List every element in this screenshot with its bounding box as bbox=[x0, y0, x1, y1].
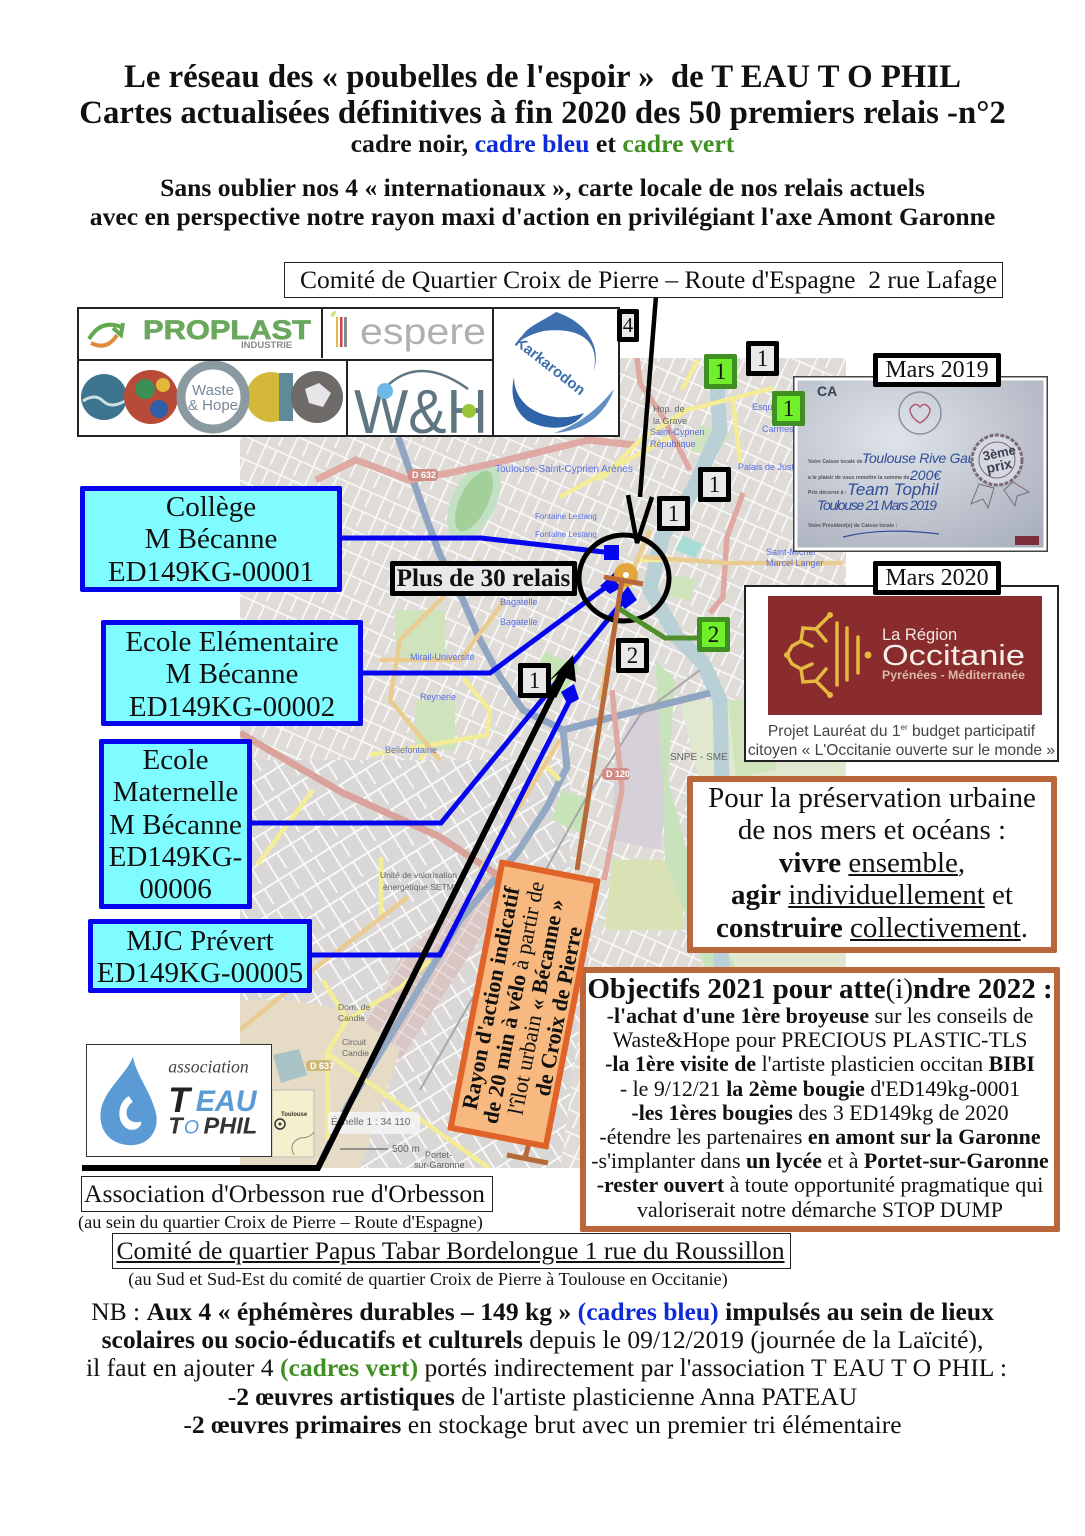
map of Toulouse: Esquirol bbox=[752, 402, 785, 412]
number box: green 1 bbox=[704, 354, 737, 389]
subtitle: frame colours: cadre noir, cadre bleu et cadre vert bbox=[351, 129, 734, 158]
blue box: MJC Prévert: MJC Prévert bbox=[126, 925, 274, 957]
logo: association T EAU T O PHIL: T bbox=[168, 1081, 193, 1120]
panel: Mars 2019 diploma: 3ème bbox=[981, 442, 1017, 464]
logo: espere: espere bbox=[360, 311, 486, 352]
map of Toulouse: Mirail-Université bbox=[410, 652, 475, 662]
callout: action radius: de 20 min à vélo à partir de bbox=[477, 879, 549, 1126]
blue box: Ecole Elémentaire: ED149KG-00002 bbox=[129, 691, 335, 723]
list of objectives: -les 1ères bougies des 3 ED149kg de 2020 bbox=[631, 1100, 1009, 1125]
title: Le réseau des « poubelles de l'espoir » de T EAU T O PHIL bbox=[124, 59, 961, 95]
panel: Mars 2019 diploma: Votre Président(e) de Caisse locale : bbox=[808, 523, 898, 529]
map of Toulouse: Fontaine Lestang bbox=[535, 512, 597, 521]
tag: Mars 2019: Mars 2019 bbox=[885, 357, 989, 383]
number box: green 1: 1 bbox=[715, 359, 726, 384]
partner logos panel bbox=[77, 307, 620, 437]
relay circle bbox=[579, 535, 669, 621]
number box: 4 partners bbox=[617, 309, 639, 342]
map of Toulouse: la Grave bbox=[653, 416, 687, 426]
arrow: black arrow from Association d'Orbesson bbox=[82, 655, 576, 1168]
map of Toulouse bbox=[240, 358, 846, 1168]
map of Toulouse: SNPE - SME bbox=[670, 752, 728, 763]
map of Toulouse: Carmes bbox=[762, 424, 794, 434]
panel: objectifs 2021 bbox=[580, 967, 1060, 1232]
list of objectives: -la 1ère visite de l'artiste plasticien occitan BIBI bbox=[605, 1051, 1035, 1076]
number box: black 1: 1 bbox=[709, 472, 720, 497]
panel: slogan: agir individuellement et bbox=[731, 879, 1013, 911]
tag: Mars 2020: Mars 2020 bbox=[885, 565, 989, 591]
map of Toulouse: Dom. de bbox=[338, 1002, 370, 1012]
caption: Occitanie project bbox=[748, 723, 1055, 759]
intro text: Sans oublier nos 4 « internationaux », carte locale de nos relais actuels bbox=[160, 173, 925, 202]
map of Toulouse: Candie bbox=[342, 1048, 369, 1058]
map of Toulouse: Circuit bbox=[342, 1037, 367, 1047]
number box: green 1: 1 bbox=[783, 396, 794, 421]
panel: Mars 2019 diploma: Toulouse Rive Gauche bbox=[862, 450, 997, 466]
callout: action radius: de Croix de Pierre bbox=[530, 924, 587, 1098]
map of Toulouse: Toulouse-Saint-Cyprien Arènes bbox=[495, 464, 633, 475]
label: Comité de quartier Papus: Comité de quartier Papus Tabar Bordelongue 1 rue du Roussillon bbox=[116, 1236, 785, 1265]
panel: Mars 2019 diploma: Team Tophil bbox=[847, 480, 940, 499]
list of objectives: valoriserait notre démarche STOP DUMP bbox=[637, 1197, 1003, 1222]
map of Toulouse: Candie bbox=[338, 1013, 365, 1023]
blue box: Collège bbox=[80, 486, 342, 592]
caption: Occitanie project: citoyen « L'Occitanie ouverte sur le monde » bbox=[748, 742, 1055, 759]
map of Toulouse: Saint-Cyprien bbox=[650, 427, 705, 437]
caption: quartier Croix de Pierre: (au sein du quartier Croix de Pierre – Route d'Espagne) bbox=[78, 1212, 483, 1232]
blue box: Collège: Collège bbox=[166, 491, 256, 523]
intro text bbox=[90, 173, 995, 231]
blue box: Ecole Maternelle: Maternelle bbox=[113, 776, 238, 808]
logo: Proplast: PROPLAST bbox=[143, 315, 311, 345]
note: NB bottom text: il faut en ajouter 4 (cadres vert) portés indirectement par l'association T EAU T O PHIL : bbox=[86, 1353, 1007, 1382]
number box: black 2 bbox=[616, 638, 649, 673]
map of Toulouse: Fontaine Lestang bbox=[535, 530, 597, 539]
panel: Occitanie award bbox=[744, 585, 1059, 762]
blue box: Ecole Maternelle: M Bécanne bbox=[109, 809, 242, 841]
panel: Mars 2019 diploma: prix bbox=[985, 455, 1013, 476]
logo: Karkarodon bbox=[492, 309, 621, 435]
blue box: Ecole Maternelle: Ecole bbox=[142, 744, 208, 776]
logo: Waste and Hope bbox=[79, 359, 346, 437]
list of objectives: Waste&Hope pour PRECIOUS PLASTIC-TLS bbox=[613, 1027, 1027, 1052]
arrow: Collège bbox=[341, 538, 619, 560]
locator mini map: Toulouse bbox=[281, 1112, 308, 1118]
logo: Région Occitanie: La Région bbox=[882, 626, 957, 644]
logo: espere bbox=[321, 309, 494, 358]
logo: Waste and Hope: Waste bbox=[192, 382, 234, 399]
list of objectives: -étendre les partenaires en amont sur la Garonne bbox=[599, 1124, 1041, 1149]
number box: black 1 bbox=[698, 467, 731, 502]
number box: black 1 bbox=[746, 341, 779, 376]
arrow: Ecole Elémentaire bbox=[362, 570, 625, 673]
title bbox=[79, 59, 1006, 131]
blue box: Ecole Maternelle bbox=[99, 739, 252, 909]
panel: Mars 2019 diploma: Prix décerné à : bbox=[808, 490, 847, 496]
note: NB bottom text: -2 œuvres primaires en stockage brut avec un premier tri élémentaire bbox=[183, 1410, 902, 1439]
panel: slogan: de nos mers et océans : bbox=[738, 814, 1006, 846]
blue box: Ecole Elémentaire: Ecole Elémentaire bbox=[125, 626, 339, 658]
map of Toulouse: Portet- bbox=[425, 1150, 452, 1160]
note: NB bottom text: -2 œuvres artistiques de l'artiste plasticienne Anna PATEAU bbox=[228, 1382, 857, 1411]
map of Toulouse: Échelle 1 : 34 110 bbox=[331, 1115, 411, 1128]
map of Toulouse: Unité de valorisation bbox=[380, 870, 457, 880]
logo: Waste and Hope: & Hope bbox=[188, 397, 238, 414]
logo: Région Occitanie: Occitanie bbox=[882, 640, 1025, 672]
list of objectives: -rester ouvert à toute opportunité pragmatique qui bbox=[597, 1172, 1043, 1197]
blue box: Ecole Elémentaire: M Bécanne bbox=[166, 658, 298, 690]
map of Toulouse: République bbox=[650, 439, 696, 449]
logo: Région Occitanie bbox=[768, 596, 1042, 715]
map of Toulouse: Bellefontaine bbox=[385, 745, 437, 755]
blue box: MJC Prévert bbox=[88, 919, 312, 993]
logo: association T EAU T O PHIL: association bbox=[168, 1057, 249, 1077]
logo: Proplast bbox=[87, 315, 312, 351]
arrow: Ecole Maternelle bbox=[251, 586, 637, 823]
panel: Mars 2019 diploma: Votre Caisse locale de : bbox=[808, 459, 866, 465]
logo: Proplast: INDUSTRIE bbox=[241, 340, 292, 351]
number box: black 1: 1 bbox=[668, 501, 679, 526]
callout: action radius: l'îlot urbain « Bécanne » bbox=[503, 897, 569, 1117]
list of objectives bbox=[591, 1003, 1049, 1222]
number box: black 1: 1 bbox=[757, 346, 768, 371]
panel: Mars 2019 diploma: a le plaisir de vous remettre la somme de : bbox=[808, 475, 913, 481]
map of Toulouse: Hop. de bbox=[653, 404, 685, 414]
panel: Mars 2019 diploma bbox=[793, 376, 1048, 552]
number box: green 1 bbox=[772, 391, 805, 426]
logo: association T EAU T O PHIL: EAU bbox=[196, 1085, 257, 1118]
blue box: Collège: ED149KG-00001 bbox=[108, 556, 314, 588]
logo: association T EAU T O PHIL: O bbox=[184, 1116, 199, 1138]
map of Toulouse: D 632 bbox=[412, 470, 436, 480]
list of objectives: - le 9/12/21 la 2ème bougie d'ED149kg-0001 bbox=[620, 1076, 1020, 1101]
callout: action radius bbox=[447, 859, 601, 1150]
map of Toulouse: 500 m bbox=[392, 1144, 420, 1155]
logo: association T EAU T O PHIL bbox=[86, 1044, 272, 1157]
blue box: Ecole Elémentaire bbox=[101, 620, 363, 726]
intro text: avec en perspective notre rayon maxi d'action en privilégiant l'axe Amont Garonne bbox=[90, 202, 995, 231]
logo: Région Occitanie: Pyrénées - Méditerranée bbox=[882, 668, 1025, 682]
blue box: Collège: M Bécanne bbox=[145, 523, 277, 555]
arrow: MJC Prévert bbox=[311, 684, 579, 955]
caption: Sud et Sud-Est: (au Sud et Sud-Est du comité de quartier Croix de Pierre à Toulouse en Occitanie) bbox=[128, 1269, 728, 1289]
map of Toulouse: Palais de Justice bbox=[738, 462, 806, 472]
label: Comité de Quartier Croix de Pierre: Comité de Quartier Croix de Pierre – Route d'Espagne 2 rue Lafage bbox=[300, 265, 997, 294]
number box: green 2 bbox=[697, 617, 730, 652]
label: Association d'Orbesson: Association d'Orbesson rue d'Orbesson bbox=[84, 1179, 485, 1208]
label: Plus de 30 relais: Plus de 30 relais bbox=[397, 565, 570, 592]
map of Toulouse: Bagatelle bbox=[500, 597, 538, 607]
panel: Mars 2019 diploma: CA bbox=[817, 383, 837, 399]
logo: Karkarodon: Karkarodon bbox=[512, 334, 588, 399]
number box: black 1: 1 bbox=[529, 668, 540, 693]
map of Toulouse: Bagatelle bbox=[500, 617, 538, 627]
blue box: Ecole Maternelle: 00006 bbox=[139, 873, 212, 905]
panel: slogan: construire collectivement. bbox=[716, 912, 1028, 944]
number box: black 2: 2 bbox=[627, 643, 638, 668]
map of Toulouse: Reynerie bbox=[420, 692, 456, 702]
map of Toulouse: énergétique SETMI bbox=[383, 882, 456, 892]
panel: Mars 2019 diploma: 200€ bbox=[909, 467, 942, 483]
list of objectives: -l'achat d'une 1ère broyeuse sur les conseils de bbox=[607, 1003, 1033, 1028]
note: NB bottom text: NB : Aux 4 « éphémères durables – 149 kg » (cadres bleu) impulsés au sein de lieux bbox=[91, 1297, 994, 1326]
panel: slogan bbox=[687, 776, 1057, 953]
heading: objectifs: Objectifs 2021 pour atte(i)ndre 2022 : bbox=[587, 973, 1053, 1005]
logo: association T EAU T O PHIL: PHIL bbox=[204, 1112, 257, 1138]
map of Toulouse: Saint-Michel bbox=[766, 547, 816, 557]
number box: black 1 bbox=[518, 663, 551, 698]
tag: Mars 2020 bbox=[873, 561, 1001, 595]
arrow: green connector bbox=[618, 608, 698, 638]
tag: Mars 2019 bbox=[873, 353, 1001, 387]
map of Toulouse: sur-Garonne bbox=[414, 1160, 465, 1170]
panel: slogan: vivre ensemble, bbox=[779, 847, 965, 879]
arrow: black arrow from Comité de Quartier bbox=[628, 296, 656, 543]
list of objectives: -s'implanter dans un lycée et à Portet-sur-Garonne bbox=[591, 1148, 1049, 1173]
note: NB bottom text bbox=[86, 1297, 1007, 1439]
blue box: Ecole Maternelle: ED149KG- bbox=[109, 841, 242, 873]
number box: green 2: 2 bbox=[708, 622, 719, 647]
panel: slogan: Pour la préservation urbaine bbox=[708, 782, 1036, 814]
map of Toulouse: D 120 bbox=[606, 769, 630, 779]
number box: black 1 bbox=[657, 496, 690, 531]
map of Toulouse: Marcel Langer bbox=[766, 558, 824, 568]
panel: Mars 2019 diploma: Toulouse 21 Mars 2019 bbox=[817, 497, 937, 513]
map of Toulouse: D 637 bbox=[310, 1061, 334, 1071]
note: NB bottom text: scolaires ou socio-éducatifs et culturels depuis le 09/12/2019 (journée de la Laïcité), bbox=[102, 1325, 983, 1354]
blue box: MJC Prévert: ED149KG-00005 bbox=[97, 957, 303, 989]
logo: association T EAU T O PHIL: T bbox=[168, 1112, 185, 1138]
title: Cartes actualisées définitives à fin 2020 des 50 premiers relais -n°2 bbox=[79, 95, 1006, 131]
callout: action radius: Rayon d'action indicatif bbox=[457, 885, 524, 1111]
number box: 4 partners: 4 bbox=[623, 313, 633, 337]
radius line with ticks bbox=[507, 577, 643, 1163]
caption: Occitanie project: Projet Lauréat du 1er budget participatif bbox=[768, 723, 1035, 740]
location marker bbox=[614, 563, 638, 587]
